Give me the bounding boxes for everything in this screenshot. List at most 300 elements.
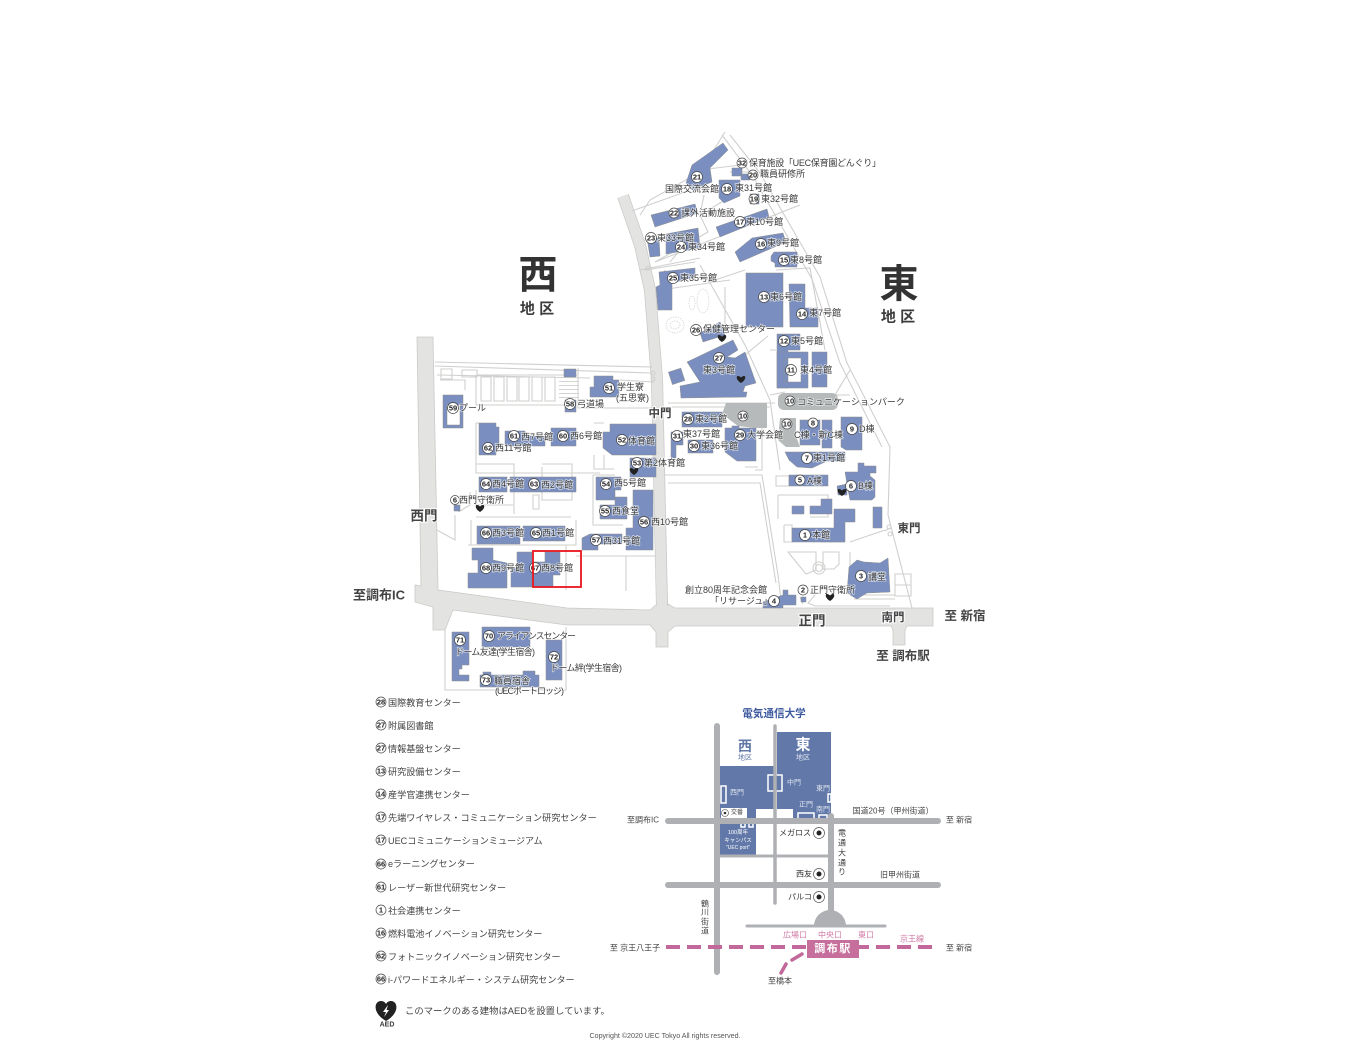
access map road and direction labels: 中央口 [818, 930, 842, 940]
access map west and east labels: 南門 [816, 804, 830, 814]
label: 西5号館 54 [600, 477, 646, 490]
label: 保健管理センター 26 [690, 323, 775, 336]
label: 創立80周年記念会館 4: 創立80周年記念会館 [685, 584, 767, 595]
building shape: 9 [841, 417, 862, 450]
label: D棟 9 [846, 423, 874, 434]
access map landmarks: メガロス [779, 828, 811, 838]
building shape: 14 [789, 284, 818, 327]
label: 職員宿舎 73: 73 [482, 676, 490, 684]
label: D棟 9: 9 [850, 424, 854, 434]
label: 西門守衛所 6: 6 [453, 496, 457, 504]
label: 弓道場 58 [564, 398, 604, 410]
label: 東1号館 7 [802, 452, 845, 464]
gate labels and directions: 至 調布駅 [876, 648, 930, 663]
label: 西10号館 56 [638, 516, 688, 528]
label: 西食堂 55: 55 [601, 506, 609, 516]
gate labels and directions: 至 新宿 [945, 608, 985, 623]
building shape: 63 [510, 477, 576, 492]
legend: research centers: 66 [377, 974, 385, 984]
access map road and direction labels: 国道20号（甲州街道） [853, 806, 933, 816]
label: 東31号館 18 [722, 182, 772, 194]
label: 西7号館 61 [508, 430, 553, 442]
building shape: 71 [452, 632, 469, 681]
marker: park 10: 10 [739, 412, 747, 420]
legend: research centers [376, 697, 597, 985]
label: 西6号館 60: 60 [559, 432, 567, 440]
heading: 西 地区 [518, 254, 558, 318]
label: ドーム友達 71: ドーム友達(学生宿舎) [455, 646, 535, 657]
label: 正門守衛所 2: 2 [801, 586, 805, 594]
label: 東4号館 11: 東4号館 [800, 364, 832, 375]
access map west and east labels: 西門 [730, 788, 744, 796]
label: 大学会館 29: 29 [736, 430, 744, 440]
label: 東1号館 7: 7 [805, 454, 809, 462]
label: 西門守衛所 6: 西門守衛所 [459, 494, 504, 505]
building shape: 8 [800, 420, 820, 445]
building shape: 28 [682, 412, 722, 427]
label: 創立80周年記念会館 4 [685, 584, 780, 606]
gate labels and directions: 正門 [798, 614, 826, 628]
access map road and direction labels: 通 [838, 858, 846, 868]
Chofu station: 調布駅 [814, 941, 852, 955]
label: 東33号館 23: 東33号館 [657, 232, 694, 243]
label: 本館 1 [800, 529, 830, 540]
label: 東37号館 31: 31 [673, 432, 681, 440]
label: 体育館 52: 体育館 [628, 435, 655, 446]
label: 弓道場 58: 弓道場 [577, 398, 604, 409]
label: 東10号館 17: 17 [736, 218, 744, 226]
building shape: 59 [443, 395, 463, 428]
legend: AED note: このマークのある建物はAEDを設置しています。 [405, 1005, 610, 1016]
label: 西8号館 67: 67 [531, 564, 539, 572]
unnamed central buildings [792, 499, 882, 528]
label: 西4号館 64 [480, 478, 524, 490]
label: 西11号館 62 [482, 442, 531, 454]
access map title: 電気通信大学 [742, 707, 806, 720]
label: 西8号館 67: 西8号館 [541, 562, 573, 573]
access map road and direction labels: 旧甲州街道 [880, 870, 920, 880]
label: A棟 5: 5 [798, 476, 802, 484]
label: 西2号館 63 [528, 478, 573, 490]
access map west and east labels: 交番 [731, 809, 743, 816]
building shape: 23 [647, 238, 660, 257]
building labels [448, 157, 905, 696]
label: 学生寮 五思寮 51: (五思寮) [616, 392, 649, 403]
access map landmarks: 西友 [796, 868, 812, 878]
building shape: 67 east [533, 552, 560, 587]
access map road and direction labels: 至 新宿 [946, 814, 972, 824]
building shape: 57 [582, 534, 622, 550]
marker: park 10 centre: 10 [783, 420, 791, 428]
label: 東34号館 24: 24 [677, 242, 686, 252]
label: 職員研修所 20 [748, 168, 805, 180]
label: 東36号館 30: 東36号館 [701, 440, 738, 451]
label: 西4号館 64: 64 [482, 480, 491, 488]
label: 東32号館 19: 東32号館 [761, 193, 798, 204]
label: 西31号館 57: 西31号館 [603, 535, 640, 546]
access map road and direction labels: 鶴 [701, 898, 709, 908]
sports courts dotted field [563, 381, 575, 398]
building shape: 18 [719, 180, 740, 203]
label: 西8号館 67 [530, 562, 573, 574]
heading: 西 地区: 地 区 [520, 300, 554, 318]
roads on access map [668, 726, 938, 972]
label: 東31号館 18: 東31号館 [735, 182, 772, 193]
legend: research centers: 27 [377, 744, 385, 752]
label: 学生寮 五思寮 51: 学生寮 [617, 381, 644, 392]
label: 西1号館 65 [530, 527, 574, 538]
label: 西2号館 63: 63 [530, 480, 538, 488]
label: A棟 5 [795, 475, 822, 486]
legend: research centers: 62 [377, 952, 385, 960]
label: 西7号館 61: 西7号館 [521, 431, 553, 442]
building shape: 25 [656, 268, 695, 310]
label: ドーム友達 71 [454, 634, 535, 657]
label: 西5号館 54: 西5号館 [614, 477, 646, 488]
access map landmarks: パルコ [788, 892, 812, 902]
gate labels and directions [353, 406, 985, 663]
label: 大学会館 29: 大学会館 [747, 429, 783, 440]
label: 東36号館 30: 30 [690, 442, 698, 450]
access map road and direction labels: 街 [701, 916, 709, 926]
label: 西3号館 66: 西3号館 [492, 527, 524, 538]
label: 西1号館 65: 西1号館 [542, 527, 574, 538]
building shape: 60 [551, 428, 576, 446]
label: 西1号館 65: 65 [532, 528, 540, 538]
label: 東37号館 31: 東37号館 [683, 428, 720, 439]
building shape: 3 [847, 558, 890, 599]
label: 東9号館 16: 東9号館 [767, 237, 799, 248]
legend: research centers: 情報基盤センター [388, 743, 461, 754]
building shape: 62 [479, 423, 499, 455]
building shape: 24 [666, 228, 700, 254]
legend: research centers: 先端ワイヤレス・コミュニケーション研究センター [388, 812, 597, 823]
label: 国際交流会館 21: 21 [693, 172, 701, 182]
label: 東7号館 14: 東7号館 [809, 307, 841, 318]
label: 西3号館 66 [480, 527, 524, 538]
legend: research centers: フォトニックイノベーション研究センター [388, 951, 561, 962]
label: 東6号館 13 [758, 291, 802, 302]
label: 東33号館 23: 23 [647, 234, 655, 242]
building shape: 73 [480, 671, 539, 687]
label: 西5号館 54: 54 [602, 480, 611, 488]
gate labels and directions: 至調布IC [353, 588, 406, 602]
building shape: 29 [725, 426, 756, 461]
label: 国際交流会館 21: 国際交流会館 [665, 183, 719, 194]
access map road and direction labels: 東口 [858, 930, 874, 940]
access map road and direction labels: 電 [838, 828, 846, 838]
legend: research centers: 17 [377, 812, 385, 822]
label: 国際交流会館 21 [665, 172, 719, 194]
label: 正門守衛所 2: 正門守衛所 [810, 584, 855, 595]
building shape: 27 [680, 340, 756, 398]
label: 西9号館 68: 68 [482, 564, 490, 572]
building shape: 7 [785, 452, 845, 468]
access map road and direction labels: 広場口 [783, 930, 807, 940]
gate labels and directions: 西門 [410, 508, 438, 524]
legend: research centers: 燃料電池イノベーション研究センター [388, 928, 542, 939]
building shape: 6 [845, 463, 876, 500]
access map west and east labels: 東 [795, 736, 811, 754]
building shape: 8 annex [822, 420, 832, 448]
legend: research centers: 社会連携センター [388, 905, 461, 916]
label: プール 59: 59 [449, 404, 457, 412]
building shape: 西門守衛所 [454, 505, 460, 511]
label: 東5号館 12: 東5号館 [791, 335, 823, 346]
label: 西食堂 55: 西食堂 [612, 505, 639, 516]
label: 講堂 3: 3 [859, 572, 863, 580]
label: 保健管理センター 26: 保健管理センター [703, 323, 775, 334]
label: ドーム友達 71: 71 [456, 636, 464, 644]
campus blocks on access map [720, 732, 831, 855]
label: 課外活動施設 22: 課外活動施設 [681, 207, 735, 218]
label: C棟 新C棟 8 [794, 418, 843, 440]
label: 西9号館 68: 西9号館 [492, 562, 524, 573]
label: 課外活動施設 22: 22 [670, 208, 678, 218]
label: 西食堂 55 [600, 505, 639, 516]
legend: research centers: 16 [377, 928, 385, 938]
label: 第2体育館 53: 第2体育館 [644, 457, 685, 468]
building shape: 56 [626, 490, 653, 550]
label: 西11号館 62: 西11号館 [495, 442, 531, 453]
legend: research centers: eラーニングセンター [388, 858, 475, 869]
label: 東3号館 27: 27 [715, 354, 723, 362]
icon: AED markers on map [476, 335, 846, 601]
building shape: 13 [746, 273, 783, 327]
legend: research centers: 28 [377, 698, 385, 706]
label: 西3号館 66: 66 [482, 528, 490, 538]
label: アライアンスセンター 70: 70 [485, 632, 493, 640]
label: D棟 9: D棟 [859, 423, 874, 434]
building shape: 5 [789, 475, 828, 486]
label: 弓道場 58: 58 [566, 400, 574, 408]
label: 保健管理センター 26: 26 [692, 326, 700, 334]
label: 第2体育館 53: 53 [633, 458, 641, 468]
label: 東8号館 15: 15 [780, 256, 788, 264]
access map west and east labels: "UEC port" [726, 845, 750, 851]
legend: research centers: 61 [377, 882, 385, 892]
label: 東2号館 28: 28 [684, 414, 692, 424]
access map west and east labels [722, 736, 830, 851]
building shape: 61 [505, 431, 545, 446]
label: 職員宿舎 73: (UECポートロッジ) [495, 686, 564, 696]
building shape: 64 [479, 477, 507, 492]
label: 東9号館 16 [756, 237, 799, 250]
building shape: 70 [482, 627, 530, 647]
building shape: 31 [671, 432, 683, 458]
label: 東33号館 23 [646, 232, 694, 244]
label: 講堂 3: 講堂 [868, 571, 886, 582]
label: 東2号館 28: 東2号館 [695, 413, 727, 424]
station plaza semicircle [814, 910, 846, 926]
legend: research centers: UECコミュニケーションミュージアム [388, 836, 543, 846]
label: 東35号館 25 [668, 272, 717, 284]
building shape: 17 [716, 209, 769, 237]
label: 東32号館 19 [749, 193, 798, 204]
label: 講堂 3 [856, 570, 886, 582]
gate labels and directions: 南門 [882, 611, 904, 624]
park areas [722, 393, 838, 447]
heading: 東 地区 [879, 264, 919, 326]
access map road and direction labels: 至 新宿 [946, 942, 972, 952]
building shape: 22 [651, 204, 698, 227]
access map west and east labels: 正門 [799, 800, 813, 808]
building shape: 53 [630, 458, 656, 477]
building shape: 58 [564, 369, 576, 412]
label: 職員研修所 20: 20 [749, 170, 757, 180]
building shape: 65 [523, 526, 565, 541]
building shape: 4 [763, 590, 796, 608]
label: 体育館 52: 52 [618, 436, 626, 444]
label: 東5号館 12: 12 [780, 336, 788, 346]
label: 東5号館 12 [778, 335, 823, 346]
access map road and direction labels: 至調布IC [627, 814, 659, 824]
legend: research centers: 国際教育センター [388, 697, 461, 708]
label: 西9号館 68 [480, 562, 524, 574]
building shape: 16 [735, 233, 786, 262]
access map road and direction labels: 通 [838, 838, 846, 848]
access map west and east labels: 地区 [796, 752, 810, 762]
access map west and east labels: キャンパス [724, 837, 752, 844]
building shape: 68 [468, 548, 507, 588]
label: 東36号館 30 [688, 440, 738, 452]
label: 東7号館 14: 14 [798, 310, 807, 318]
label: 西31号館 57 [590, 534, 640, 546]
legend: research centers: 1 [379, 906, 383, 914]
building shape: 15 [771, 252, 797, 267]
label: 東10号館 17 [734, 216, 783, 228]
legend: research centers: 66 [377, 860, 385, 868]
label: アライアンスセンター 70: アライアンスセンター [497, 631, 576, 641]
label: 西7号館 61: 61 [510, 432, 518, 440]
legend: research centers: 17 [377, 836, 385, 844]
building shape: 1 [792, 509, 855, 542]
legend: research centers: 14 [377, 790, 386, 798]
label: 東3号館 27: 東3号館 [703, 364, 735, 375]
building shape: 67 west [511, 552, 532, 587]
legend: research centers: 産学官連携センター [388, 789, 470, 800]
legend: research centers: 研究設備センター [388, 766, 461, 777]
gate labels and directions: 中門 [648, 406, 672, 420]
building shape: 27 annex [668, 368, 685, 385]
garden pond [666, 289, 709, 333]
label: 西2号館 63: 西2号館 [541, 479, 573, 490]
access map west and east labels: 東門 [816, 784, 830, 792]
Chofu station [807, 940, 859, 958]
label: 学生寮 五思寮 51: 51 [605, 384, 613, 392]
building shape: 72 [546, 640, 562, 680]
campus buildings [443, 143, 890, 687]
label: 東4号館 11: 11 [787, 366, 795, 374]
access map road and direction labels: 京王線 [900, 934, 924, 944]
building shape: 2 [801, 597, 806, 602]
label: 職員研修所 20: 職員研修所 [760, 168, 805, 179]
label: 東32号館 19: 19 [750, 194, 758, 204]
legend: research centers: 27 [377, 720, 385, 730]
label: 東7号館 14 [796, 307, 841, 320]
building shape: 19 [750, 194, 759, 204]
label: 職員宿舎 73: 職員宿舎 [494, 675, 530, 686]
label: 保育施設 32: 保育施設「UEC保育園どんぐり」 [749, 157, 881, 168]
label: 東9号館 16: 16 [757, 240, 765, 248]
label: 東6号館 13: 東6号館 [770, 291, 802, 302]
label: 東35号館 25: 25 [669, 274, 677, 282]
label: 東34号館 24: 東34号館 [688, 241, 725, 252]
legend: research centers: i-パワードエネルギー・システム研究センター [388, 974, 575, 985]
access map road and direction labels: 至橋本 [768, 976, 792, 986]
label: 東31号館 18: 18 [723, 184, 731, 194]
access map west and east labels: 中門 [787, 778, 801, 786]
building shape: 52 [603, 424, 656, 455]
label: C棟 新C棟 8: 8 [811, 418, 815, 428]
building shape: 32 and 20 [732, 168, 750, 180]
label: 西6号館 60: 西6号館 [570, 430, 602, 441]
heading: 東 地区: 地 区 [881, 308, 915, 326]
building shape: 66 [477, 526, 520, 544]
label: 東1号館 7: 東1号館 [813, 452, 845, 463]
label: 体育館 52 [616, 434, 655, 446]
legend: AED note: AED [380, 1022, 394, 1028]
building shape: 30 [688, 440, 713, 453]
label: コミュニケーションパーク 10: 10 [786, 396, 794, 406]
main campus roads [415, 196, 933, 647]
label: 創立80周年記念会館 4: 4 [772, 596, 777, 606]
label: 本館 1: 1 [803, 530, 807, 540]
label: 東8号館 15: 東8号館 [790, 254, 822, 265]
label: 東6号館 13: 13 [760, 292, 768, 302]
label: 学生寮 五思寮 51 [604, 381, 649, 403]
heading: 東 地区: 東 [879, 264, 919, 306]
label: 西10号館 56: 56 [640, 518, 648, 526]
heading: 西 地区: 西 [518, 254, 558, 298]
label: 創立80周年記念会館 4: 「リサージュ」 [710, 596, 772, 606]
legend: AED note [376, 1001, 610, 1028]
building shape: 21 [686, 143, 728, 190]
label: A棟 5: A棟 [807, 475, 822, 486]
label: 西4号館 64: 西4号館 [492, 478, 524, 489]
label: 西11号館 62: 62 [484, 444, 492, 452]
label: B棟 6: B棟 [858, 480, 873, 491]
label: B棟 6 [846, 480, 873, 492]
legend: research centers: レーザー新世代研究センター [388, 882, 506, 893]
legend: research centers: 附属図書館 [388, 720, 433, 731]
access map landmarks [779, 828, 824, 902]
label: 東2号館 28 [682, 413, 727, 424]
label: 東34号館 24 [676, 241, 725, 252]
access map road and direction labels: 川 [701, 908, 709, 916]
label: 東3号館 27 [703, 352, 735, 375]
highlight: red rectangle around 西8号館 [533, 551, 581, 587]
building shape: 55 [600, 497, 627, 519]
label: ドーム絆 72 [548, 652, 622, 673]
label: 西10号館 56: 西10号館 [651, 516, 688, 527]
gate labels and directions: 東門 [898, 521, 920, 535]
label: ドーム絆 72: ドーム絆(学生宿舎) [550, 662, 622, 673]
label: 大学会館 29 [734, 429, 783, 440]
legend: research centers: 13 [377, 766, 385, 776]
label: C棟 新C棟 8: C棟・新C棟 [794, 429, 843, 440]
label: プール 59 [448, 402, 486, 414]
label: 東37号館 31 [672, 428, 720, 442]
label: 保育施設 32: 32 [738, 158, 746, 168]
access map road and direction labels: 道 [701, 926, 709, 936]
label: コミュニケーションパーク 10: コミュニケーションパーク [797, 397, 905, 407]
building shape: 11 [777, 352, 808, 388]
label: 東10号館 17: 東10号館 [746, 216, 783, 227]
label: プール 59: プール [459, 403, 486, 413]
access map road and direction labels: り [838, 868, 846, 876]
building shape: 51 [590, 376, 619, 397]
